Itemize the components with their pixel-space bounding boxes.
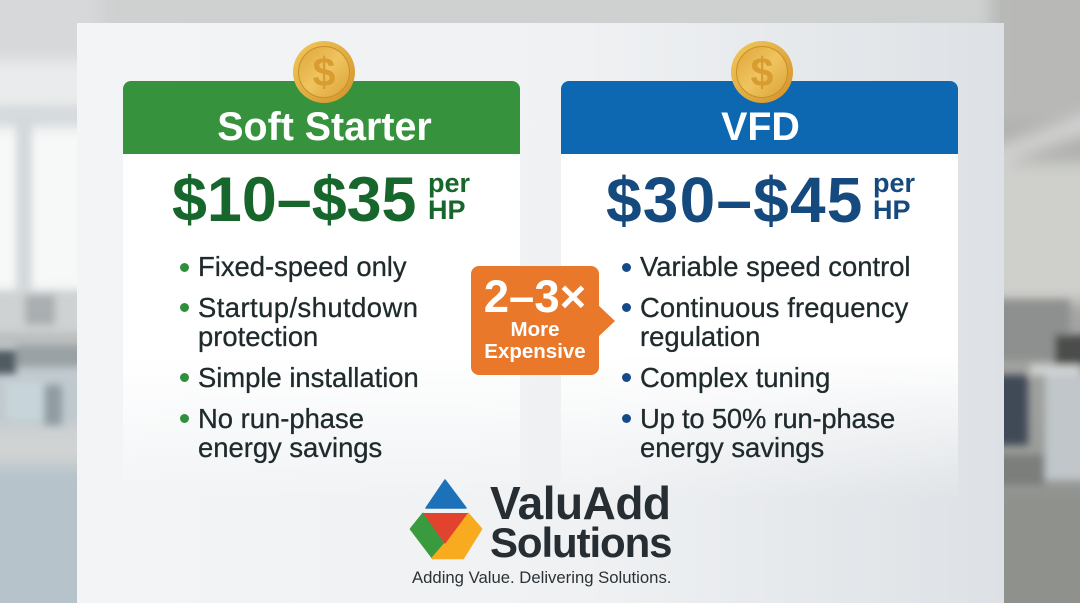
header bar: green <box>123 81 520 154</box>
icon: coin right <box>731 41 793 103</box>
logo: ValuAdd Solutions <box>410 477 671 587</box>
callout label <box>484 318 586 363</box>
per HP unit <box>873 168 915 225</box>
logo: ValuAdd Solutions: Solutions <box>490 519 671 566</box>
heading: Soft Starter: Soft Starter <box>217 105 432 149</box>
price: Soft Starter: $10–$35 <box>172 165 416 235</box>
per HP unit: HP <box>428 195 466 225</box>
panel: VFD <box>561 81 958 464</box>
icon: coin right: $ <box>751 49 774 95</box>
feature list: Startup/shutdown <box>198 292 418 323</box>
per HP unit <box>428 168 470 225</box>
feature list: energy savings <box>640 432 824 463</box>
feature list: Complex tuning <box>640 362 830 393</box>
per HP unit: per <box>428 168 470 198</box>
callout arrow <box>597 304 615 338</box>
feature list: regulation <box>640 321 760 352</box>
callout label: More <box>510 318 559 341</box>
panel: Soft Starter <box>123 81 520 464</box>
feature list: Fixed-speed only <box>198 251 407 282</box>
callout: 2–3× more expensive <box>471 266 615 375</box>
callout body <box>471 266 599 375</box>
callout label: Expensive <box>484 340 586 363</box>
logo mark <box>410 479 482 560</box>
header bar: blue <box>561 81 958 154</box>
per HP unit: per <box>873 168 915 198</box>
callout multiplier: 2–3× <box>484 271 586 322</box>
per HP unit: HP <box>873 195 911 225</box>
feature list: protection <box>198 321 318 352</box>
logo tagline: Adding Value. Delivering Solutions. <box>412 568 671 587</box>
feature list: Continuous frequency <box>640 292 908 323</box>
card body <box>561 81 958 501</box>
feature list: energy savings <box>198 432 382 463</box>
logo wordmark: ValuAdd <box>490 477 671 529</box>
heading: VFD: VFD <box>721 105 800 149</box>
feature list <box>180 251 419 464</box>
icon: coin left <box>293 41 355 103</box>
feature list: Variable speed control <box>640 251 911 282</box>
price: VFD: $30–$45 <box>606 164 864 236</box>
feature list: No run-phase <box>198 403 364 434</box>
feature list: Simple installation <box>198 362 419 393</box>
feature list <box>622 251 911 464</box>
card body <box>123 81 520 501</box>
feature list: Up to 50% run-phase <box>640 403 895 434</box>
icon: coin left: $ <box>313 49 336 95</box>
